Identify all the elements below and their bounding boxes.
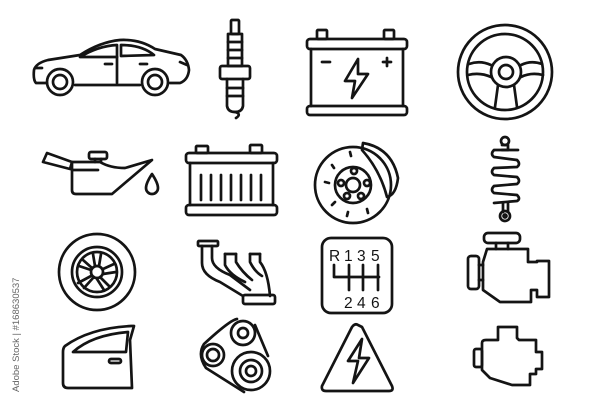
icon: gear shift pattern: 5 xyxy=(371,248,380,265)
icon: oil can xyxy=(43,152,158,194)
icon: wheel xyxy=(59,234,135,310)
icon: gear shift pattern: 3 xyxy=(357,248,366,265)
icon: gear shift pattern: 4 xyxy=(357,295,366,312)
icon: engine xyxy=(468,233,549,302)
icon: belt and pulleys xyxy=(201,319,270,392)
icon: gear shift pattern: 6 xyxy=(371,295,380,312)
icon: steering wheel xyxy=(458,25,552,119)
icon: battery cells xyxy=(186,145,277,215)
icon: car door xyxy=(63,326,134,388)
icon: high voltage triangle xyxy=(322,324,393,391)
icon: car xyxy=(34,40,189,95)
icon: spark plug xyxy=(220,20,250,118)
icon: gear shift pattern: R xyxy=(329,248,340,265)
watermark credit text: Adobe Stock | #168630537 xyxy=(11,278,22,392)
icon: gear shift pattern xyxy=(322,238,392,313)
icon: gear shift pattern: 1 xyxy=(344,248,353,265)
icon: brake disc xyxy=(315,143,398,223)
icon: gear shift pattern: 2 xyxy=(344,295,353,312)
icon: exhaust manifold xyxy=(198,241,275,304)
icon: car battery with bolt xyxy=(307,30,407,115)
icon: engine outline xyxy=(474,327,542,385)
icon: shock absorber xyxy=(492,137,519,221)
